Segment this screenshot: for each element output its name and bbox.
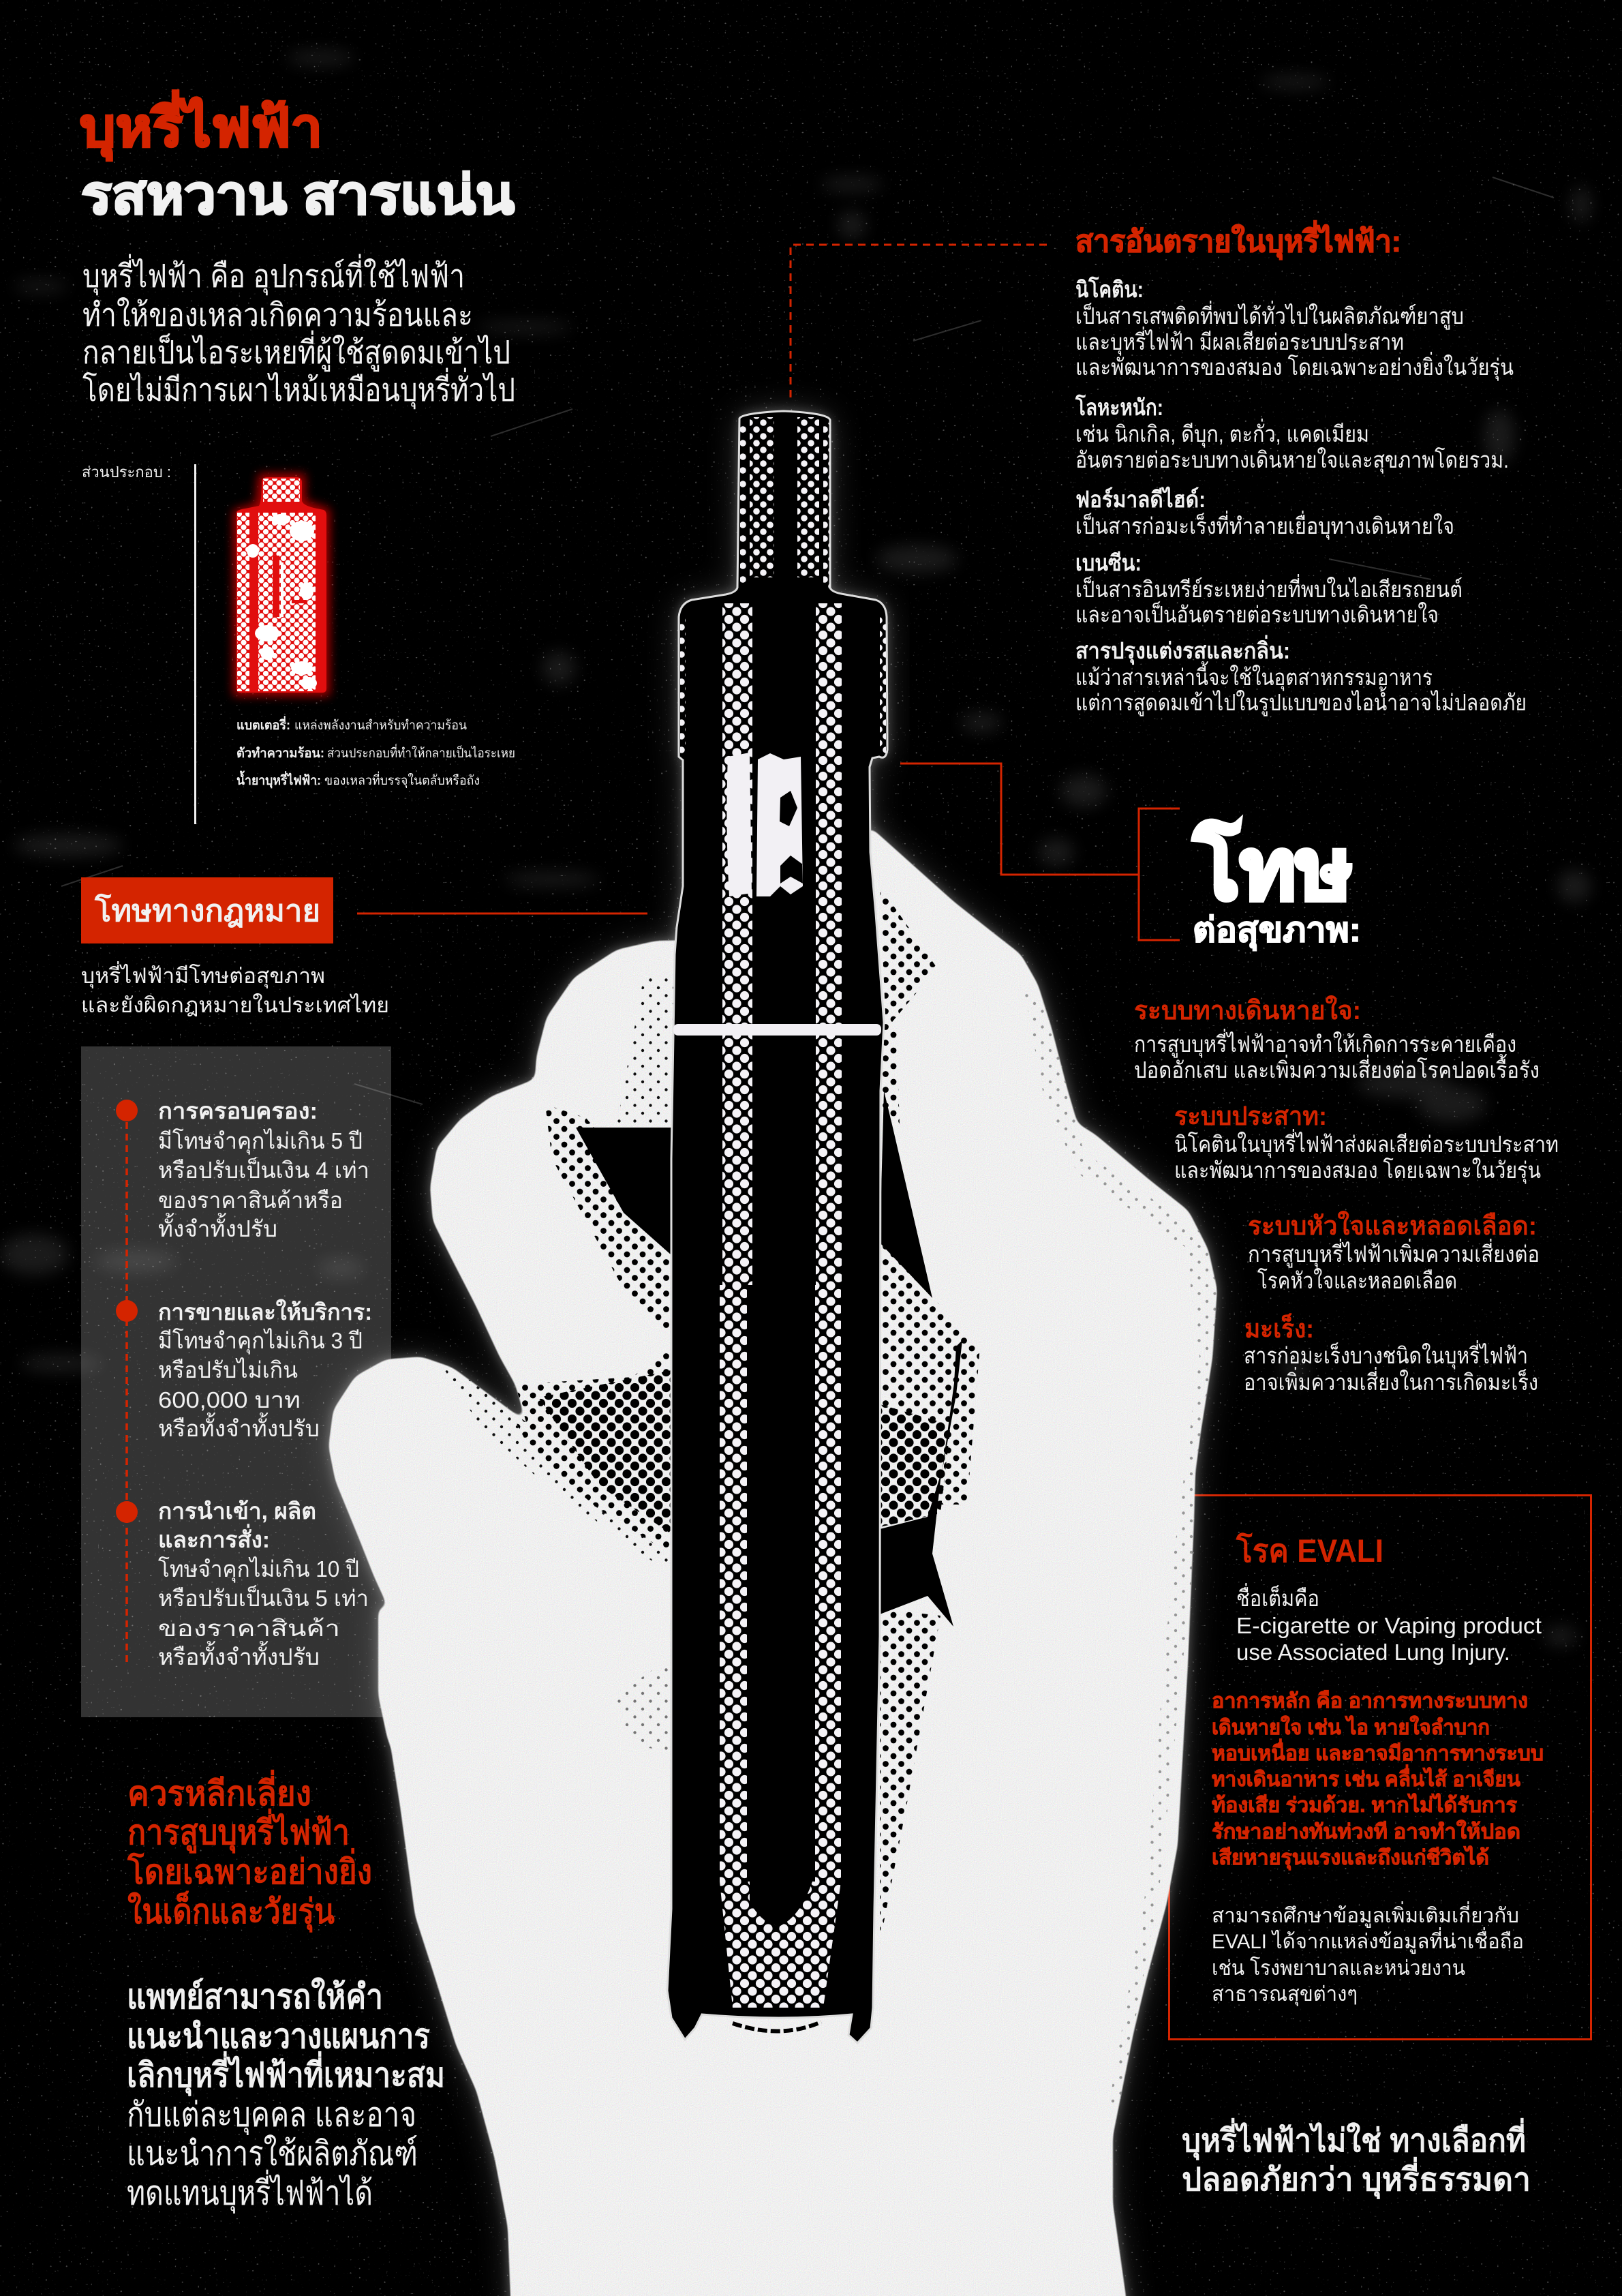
harmful substances list: [1075, 276, 1527, 716]
harmful substances list: แม้ว่าสารเหล่านี้จะใช้ในอุตสาหกรรมอาหาร: [1075, 661, 1433, 691]
vape pen illustration: [667, 411, 887, 2043]
legal: possession: [158, 1098, 369, 1241]
intro text: ทำให้ของเหลวเกิดความร้อนและ: [82, 297, 473, 333]
heading: legal penalties: [81, 877, 333, 943]
health harm: cardiovascular: การสูบบุหรี่ไฟฟ้าเพิ่มความเสี่ยงต่อ: [1248, 1239, 1540, 1268]
icon: battery: [236, 477, 326, 693]
component captions: แบตเตอรี่:: [236, 716, 290, 733]
health harm: cancer: [1244, 1313, 1538, 1395]
EVALI text: E-cigarette or Vaping product: [1236, 1613, 1542, 1638]
legal: sale and service: การขายและให้บริการ:: [158, 1299, 372, 1325]
health harm: cancer: มะเร็ง:: [1244, 1313, 1314, 1344]
harmful substances list: เช่น นิกเกิล, ดีบุก, ตะกั่ว, แคดเมียม: [1075, 419, 1369, 448]
legal: possession: การครอบครอง:: [158, 1098, 318, 1123]
pen white band: [673, 1024, 881, 1036]
EVALI more info: EVALI ได้จากแหล่งข้อมูลที่น่าเชื่อถือ: [1212, 1927, 1524, 1954]
harmful substances list: อันตรายต่อระบบทางเดินหายใจและสุขภาพโดยรวม.: [1075, 447, 1509, 474]
EVALI symptoms: เดินหายใจ เช่น ไอ หายใจลำบาก: [1212, 1715, 1490, 1739]
harmful substances list: นิโคติน:: [1075, 276, 1144, 302]
closing statement: บุหรี่ไฟฟ้าไม่ใช่ ทางเลือกที่: [1182, 2117, 1526, 2160]
harmful substances list: และบุหรี่ไฟฟ้า มีผลเสียต่อระบบประสาท: [1075, 327, 1404, 356]
warning text: ควรหลีกเลี่ยง: [127, 1770, 311, 1813]
warning text: การสูบบุหรี่ไฟฟ้า: [127, 1809, 350, 1854]
EVALI more info: [1212, 1901, 1524, 2007]
component captions: แหล่งพลังงานสำหรับทำความร้อน: [294, 719, 467, 733]
component captions: ตัวทำความร้อน:: [236, 746, 324, 761]
warning text: โดยเฉพาะอย่างยิ่ง: [127, 1848, 372, 1891]
EVALI symptoms: ทางเดินอาหาร เช่น คลื่นไส้ อาเจียน: [1212, 1764, 1520, 1791]
title: บุหรี่ไฟฟ้า: [80, 90, 322, 161]
legal: possession: ทั้งจำทั้งปรับ: [158, 1213, 277, 1241]
EVALI more info: เช่น โรงพยาบาลและหน่วยงาน: [1212, 1956, 1465, 1980]
component captions: [236, 716, 515, 789]
legal intro: และยังผิดกฎหมายในประเทศไทย: [81, 993, 389, 1017]
legal: sale and service: 600,000 บาท: [158, 1387, 301, 1413]
legal intro: บุหรี่ไฟฟ้ามีโทษต่อสุขภาพ: [81, 961, 325, 989]
pen bottom arc: [733, 2022, 821, 2031]
legal: sale and service: มีโทษจำคุกไม่เกิน 3 ปี: [158, 1328, 363, 1355]
legal: import and production: หรือทั้งจำทั้งปรับ: [158, 1641, 320, 1670]
health harm: cancer: อาจเพิ่มความเสี่ยงในการเกิดมะเร็ง: [1244, 1367, 1538, 1395]
health harm: nervous system: [1174, 1102, 1559, 1184]
arrow: dashed connector to harmful substances: [791, 245, 1048, 397]
intro text: บุหรี่ไฟฟ้า คือ อุปกรณ์ที่ใช้ไฟฟ้า: [82, 254, 465, 296]
pen window: [726, 753, 803, 896]
EVALI symptoms: หอบเหนื่อย และอาจมีอาการทางระบบ: [1212, 1738, 1544, 1765]
legal: possession: มีโทษจำคุกไม่เกิน 5 ปี: [158, 1128, 363, 1155]
EVALI text: โรค EVALI: [1236, 1532, 1383, 1569]
harmful substances list: เป็นสารก่อมะเร็งที่ทำลายเยื่อบุทางเดินหายใจ: [1075, 511, 1454, 540]
health harm: cardiovascular: โรคหัวใจและหลอดเลือด: [1257, 1268, 1457, 1293]
EVALI more info: สาธารณสุขต่างๆ: [1212, 1983, 1358, 2007]
health harm: respiratory: ปอดอักเสบ และเพิ่มความเสี่ยงต่อโรคปอดเรื้อรัง: [1134, 1054, 1540, 1083]
health harm: nervous system: นิโคตินในบุหรี่ไฟฟ้าส่งผลเสียต่อระบบประสาท: [1174, 1129, 1559, 1158]
EVALI symptoms: เสียหายรุนแรงและถึงแก่ชีวิตได้: [1212, 1845, 1489, 1871]
heading: legal penalties: โทษทางกฎหมาย: [94, 892, 320, 928]
arrow: connector to health harm: [900, 764, 1180, 940]
EVALI symptoms: อาการหลัก คือ อาการทางระบบทาง: [1212, 1690, 1528, 1712]
legal: import and production: และการสั่ง:: [158, 1524, 270, 1552]
harmful substances list: เบนซีน:: [1075, 550, 1142, 575]
health harm: respiratory: ระบบทางเดินหายใจ:: [1134, 995, 1361, 1025]
doctor advice text: ทดแทนบุหรี่ไฟฟ้าได้: [127, 2170, 373, 2214]
intro text: [82, 254, 515, 410]
component captions: น้ำยาบุหรี่ไฟฟ้า:: [236, 770, 321, 789]
warning text: [127, 1770, 372, 1933]
EVALI text: [1236, 1532, 1542, 1665]
warning text: ในเด็กและวัยรุ่น: [127, 1890, 335, 1933]
harmful substances list: สารปรุงแต่งรสและกลิ่น:: [1075, 635, 1290, 665]
health harm: respiratory: การสูบบุหรี่ไฟฟ้าอาจทำให้เกิดการระคายเคือง: [1134, 1029, 1516, 1058]
title: รสหวาน สารแน่น: [81, 165, 515, 225]
legal: import and production: หรือปรับเป็นเงิน 5 เท่า: [158, 1585, 369, 1611]
harmful substances list: ฟอร์มาลดีไฮด์:: [1075, 486, 1206, 512]
heading: health harms: โทษ: [1193, 821, 1352, 917]
box: EVALI: [1169, 1496, 1591, 2040]
closing statement: ปลอดภัยกว่า บุหรี่ธรรมดา: [1182, 2156, 1531, 2199]
hand illustration: [328, 827, 1220, 2296]
EVALI symptoms: รักษาอย่างทันท่วงที อาจทำให้ปอด: [1212, 1819, 1520, 1843]
doctor advice text: แนะนำการใช้ผลิตภัณฑ์: [127, 2134, 418, 2173]
pen highlight stripes: [680, 417, 886, 2008]
arrow: connector to legal penalties: [357, 912, 647, 915]
health harm: cancer: สารก่อมะเร็งบางชนิดในบุหรี่ไฟฟ้า: [1244, 1340, 1528, 1370]
component captions: ส่วนประกอบที่ทำให้กลายเป็นไอระเหย: [327, 744, 515, 761]
legal intro: [81, 961, 389, 1017]
heading: harmful substances: สารอันตรายในบุหรี่ไฟฟ้า:: [1075, 220, 1401, 260]
health harm: cardiovascular: [1248, 1211, 1540, 1293]
EVALI text: ชื่อเต็มคือ: [1236, 1583, 1319, 1611]
title: [80, 90, 515, 225]
harmful substances list: เป็นสารเสพติดที่พบได้ทั่วไปในผลิตภัณฑ์ยาสูบ: [1075, 301, 1464, 330]
EVALI text: use Associated Lung Injury.: [1236, 1640, 1510, 1665]
divider line: [194, 464, 196, 824]
EVALI more info: สามารถศึกษาข้อมูลเพิ่มเติมเกี่ยวกับ: [1212, 1901, 1519, 1928]
health harm: nervous system: และพัฒนาการของสมอง โดยเฉพาะในวัยรุ่น: [1174, 1158, 1541, 1184]
doctor advice text: แนะนำและวางแผนการ: [127, 2017, 430, 2055]
panel: legal penalties background: [81, 1046, 391, 1717]
component captions: ของเหลวที่บรรจุในตลับหรือถัง: [324, 771, 480, 789]
doctor advice text: [127, 1977, 445, 2214]
EVALI symptoms: ท้องเสีย ร่วมด้วย. หากไม่ได้รับการ: [1212, 1793, 1517, 1817]
health harm: cardiovascular: ระบบหัวใจและหลอดเลือด:: [1248, 1211, 1537, 1241]
harmful substances list: แต่การสูดดมเข้าไปในรูปแบบของไอน้ำอาจไม่ปลอดภัย: [1075, 686, 1527, 716]
doctor advice text: แพทย์สามารถให้คำ: [127, 1977, 383, 2016]
health harm: respiratory: [1134, 995, 1540, 1083]
closing statement: [1182, 2117, 1531, 2199]
EVALI symptoms: [1212, 1690, 1544, 1871]
harmful substances list: และพัฒนาการของสมอง โดยเฉพาะอย่างยิ่งในวัยรุ่น: [1075, 352, 1514, 381]
harmful substances list: เป็นสารอินทรีย์ระเหยง่ายที่พบในไอเสียรถยนต์: [1075, 574, 1463, 602]
legal: possession: ของราคาสินค้าหรือ: [158, 1188, 343, 1213]
legal: sale and service: หรือทั้งจำทั้งปรับ: [158, 1413, 320, 1441]
hand and pen glow: [328, 411, 1217, 2296]
timeline: [116, 1100, 138, 1665]
legal: import and production: การนำเข้า, ผลิต: [158, 1498, 316, 1524]
heading: health harms: [1193, 821, 1361, 951]
legal: sale and service: หรือปรับไม่เกิน: [158, 1357, 298, 1383]
components label: ส่วนประกอบ :: [82, 464, 171, 481]
legal: import and production: โทษจำคุกไม่เกิน 10 ปี: [158, 1556, 359, 1583]
doctor advice text: เลิกบุหรี่ไฟฟ้าที่เหมาะสม: [127, 2051, 445, 2096]
intro text: กลายเป็นไอระเหยที่ผู้ใช้สูดดมเข้าไป: [82, 330, 510, 372]
intro text: โดยไม่มีการเผาไหม้เหมือนบุหรี่ทั่วไป: [82, 367, 515, 410]
heading: health harms: ต่อสุขภาพ:: [1193, 911, 1361, 951]
legal: possession: หรือปรับเป็นเงิน 4 เท่า: [158, 1157, 369, 1183]
health harm: nervous system: ระบบประสาท:: [1174, 1102, 1327, 1131]
harmful substances list: และอาจเป็นอันตรายต่อระบบทางเดินหายใจ: [1075, 601, 1439, 627]
harmful substances list: โลหะหนัก:: [1075, 394, 1163, 420]
legal: import and production: [158, 1498, 369, 1670]
legal: sale and service: [158, 1299, 372, 1441]
doctor advice text: กับแต่ละบุคคล และอาจ: [127, 2096, 416, 2135]
legal: import and production: ของราคาสินค้า: [158, 1616, 340, 1641]
